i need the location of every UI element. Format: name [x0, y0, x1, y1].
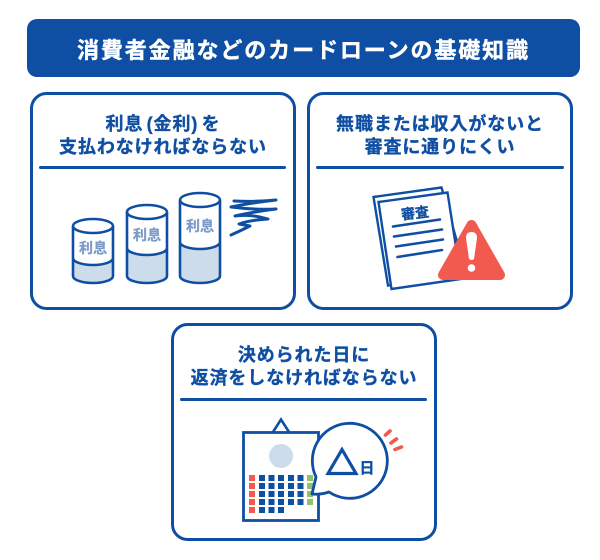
icon: warning triangle — [443, 225, 500, 275]
panel heading: hard to pass: 審査に通りにくい — [365, 137, 515, 157]
icon: small cylinder: 利息 — [79, 240, 107, 256]
panel: interest — [32, 94, 294, 308]
icon: emphasis dashes — [386, 431, 402, 450]
icon: calendar — [244, 420, 318, 520]
icon: scribble — [231, 200, 276, 235]
icon: document — [374, 188, 466, 289]
day label: 日 — [359, 460, 375, 477]
panel heading: no job: 無職または収入がないと — [336, 113, 544, 134]
panel heading: interest: 利息 (金利) を — [105, 113, 221, 134]
panel: no income — [308, 94, 572, 308]
title: 消費者金融などのカードローンの基礎知識 — [77, 38, 530, 63]
icon: medium cylinder: 利息 — [133, 227, 161, 243]
icon: large cylinder — [180, 193, 220, 283]
panel heading: fixed date: 決められた日に — [238, 345, 370, 365]
icon: medium cylinder — [127, 205, 167, 283]
panel heading: must pay: 支払わなければならない — [59, 137, 267, 157]
panel heading: must repay: 返済をしなければならない — [191, 368, 417, 388]
icon: document: 審査 — [400, 203, 430, 223]
icon: large cylinder: 利息 — [186, 218, 214, 234]
icon: speech bubble — [312, 423, 387, 498]
icon: small cylinder — [73, 219, 113, 283]
panel: repayment — [172, 324, 436, 540]
title banner — [27, 19, 580, 77]
